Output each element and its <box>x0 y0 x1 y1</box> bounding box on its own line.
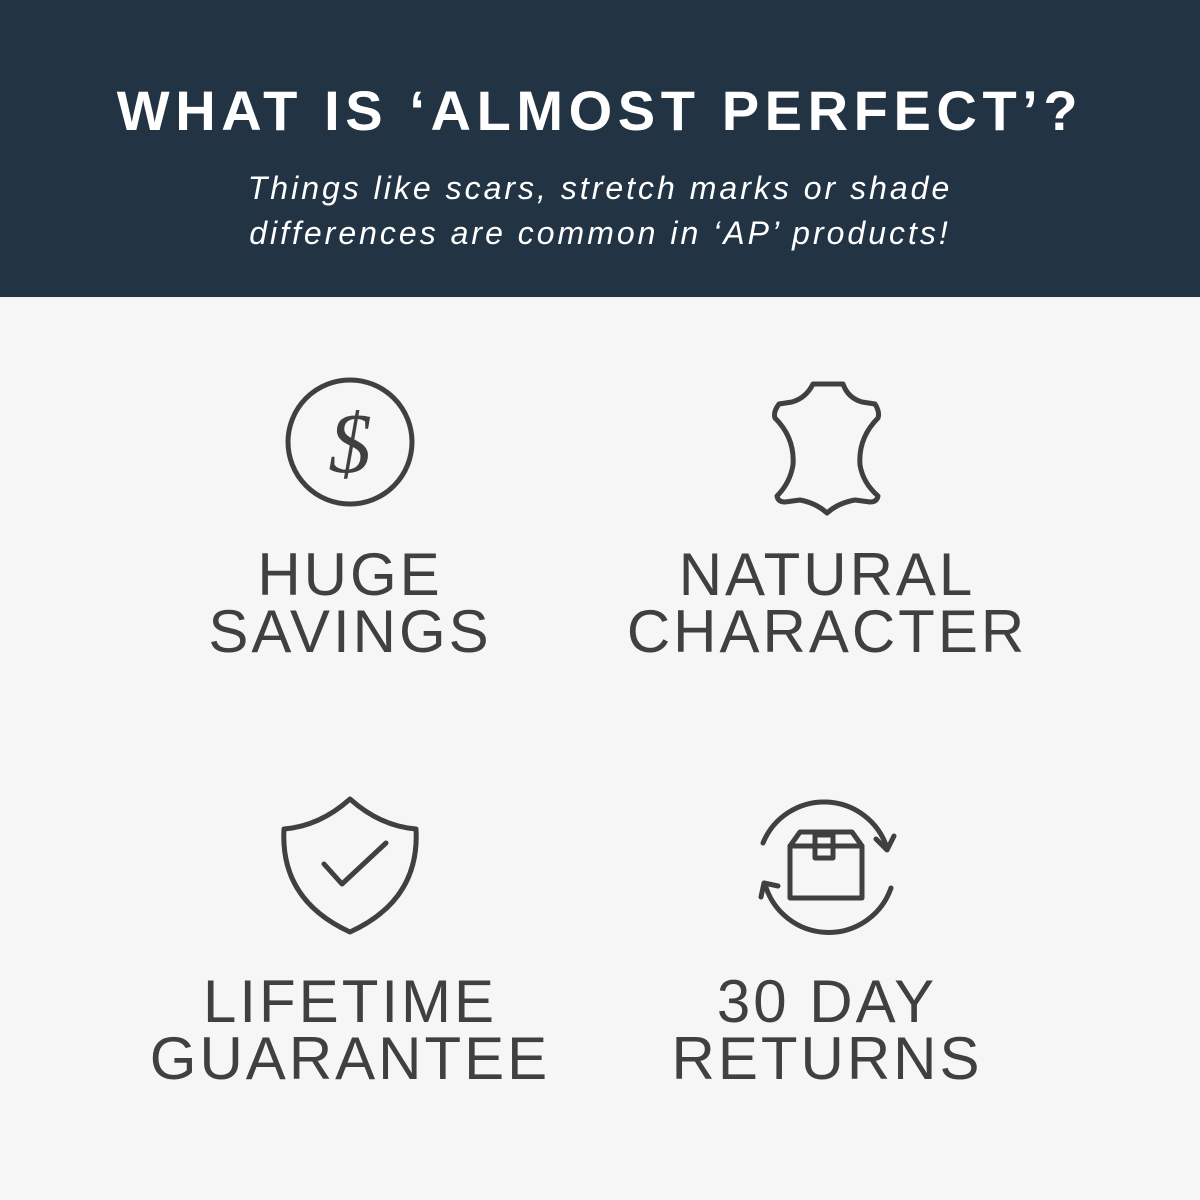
label: lifetime guarantee <box>150 968 550 1092</box>
icon: leather <box>774 384 879 513</box>
icon: returns <box>761 802 894 932</box>
header banner <box>0 0 1200 297</box>
label: 30 day returns <box>671 968 982 1092</box>
label: 30 day returns: RETURNS <box>671 1025 982 1092</box>
label: huge savings: SAVINGS <box>208 598 492 665</box>
label: huge savings <box>208 541 492 665</box>
label: natural character: NATURAL <box>679 541 975 608</box>
icon: dollar <box>288 380 412 504</box>
label: lifetime guarantee: GUARANTEE <box>150 1025 550 1092</box>
subtitle <box>248 170 952 251</box>
title: WHAT IS ‘ALMOST PERFECT’? <box>117 79 1083 142</box>
label: natural character <box>627 541 1027 665</box>
subtitle: differences are common in ‘AP’ products! <box>249 215 951 251</box>
subtitle: Things like scars, stretch marks or shade <box>248 170 952 206</box>
label: lifetime guarantee: LIFETIME <box>203 968 497 1035</box>
icon: shield <box>284 799 416 932</box>
icon: dollar: $ <box>328 395 372 491</box>
label: 30 day returns: 30 DAY <box>717 968 937 1035</box>
label: natural character: CHARACTER <box>627 598 1027 665</box>
label: huge savings: HUGE <box>257 541 443 608</box>
